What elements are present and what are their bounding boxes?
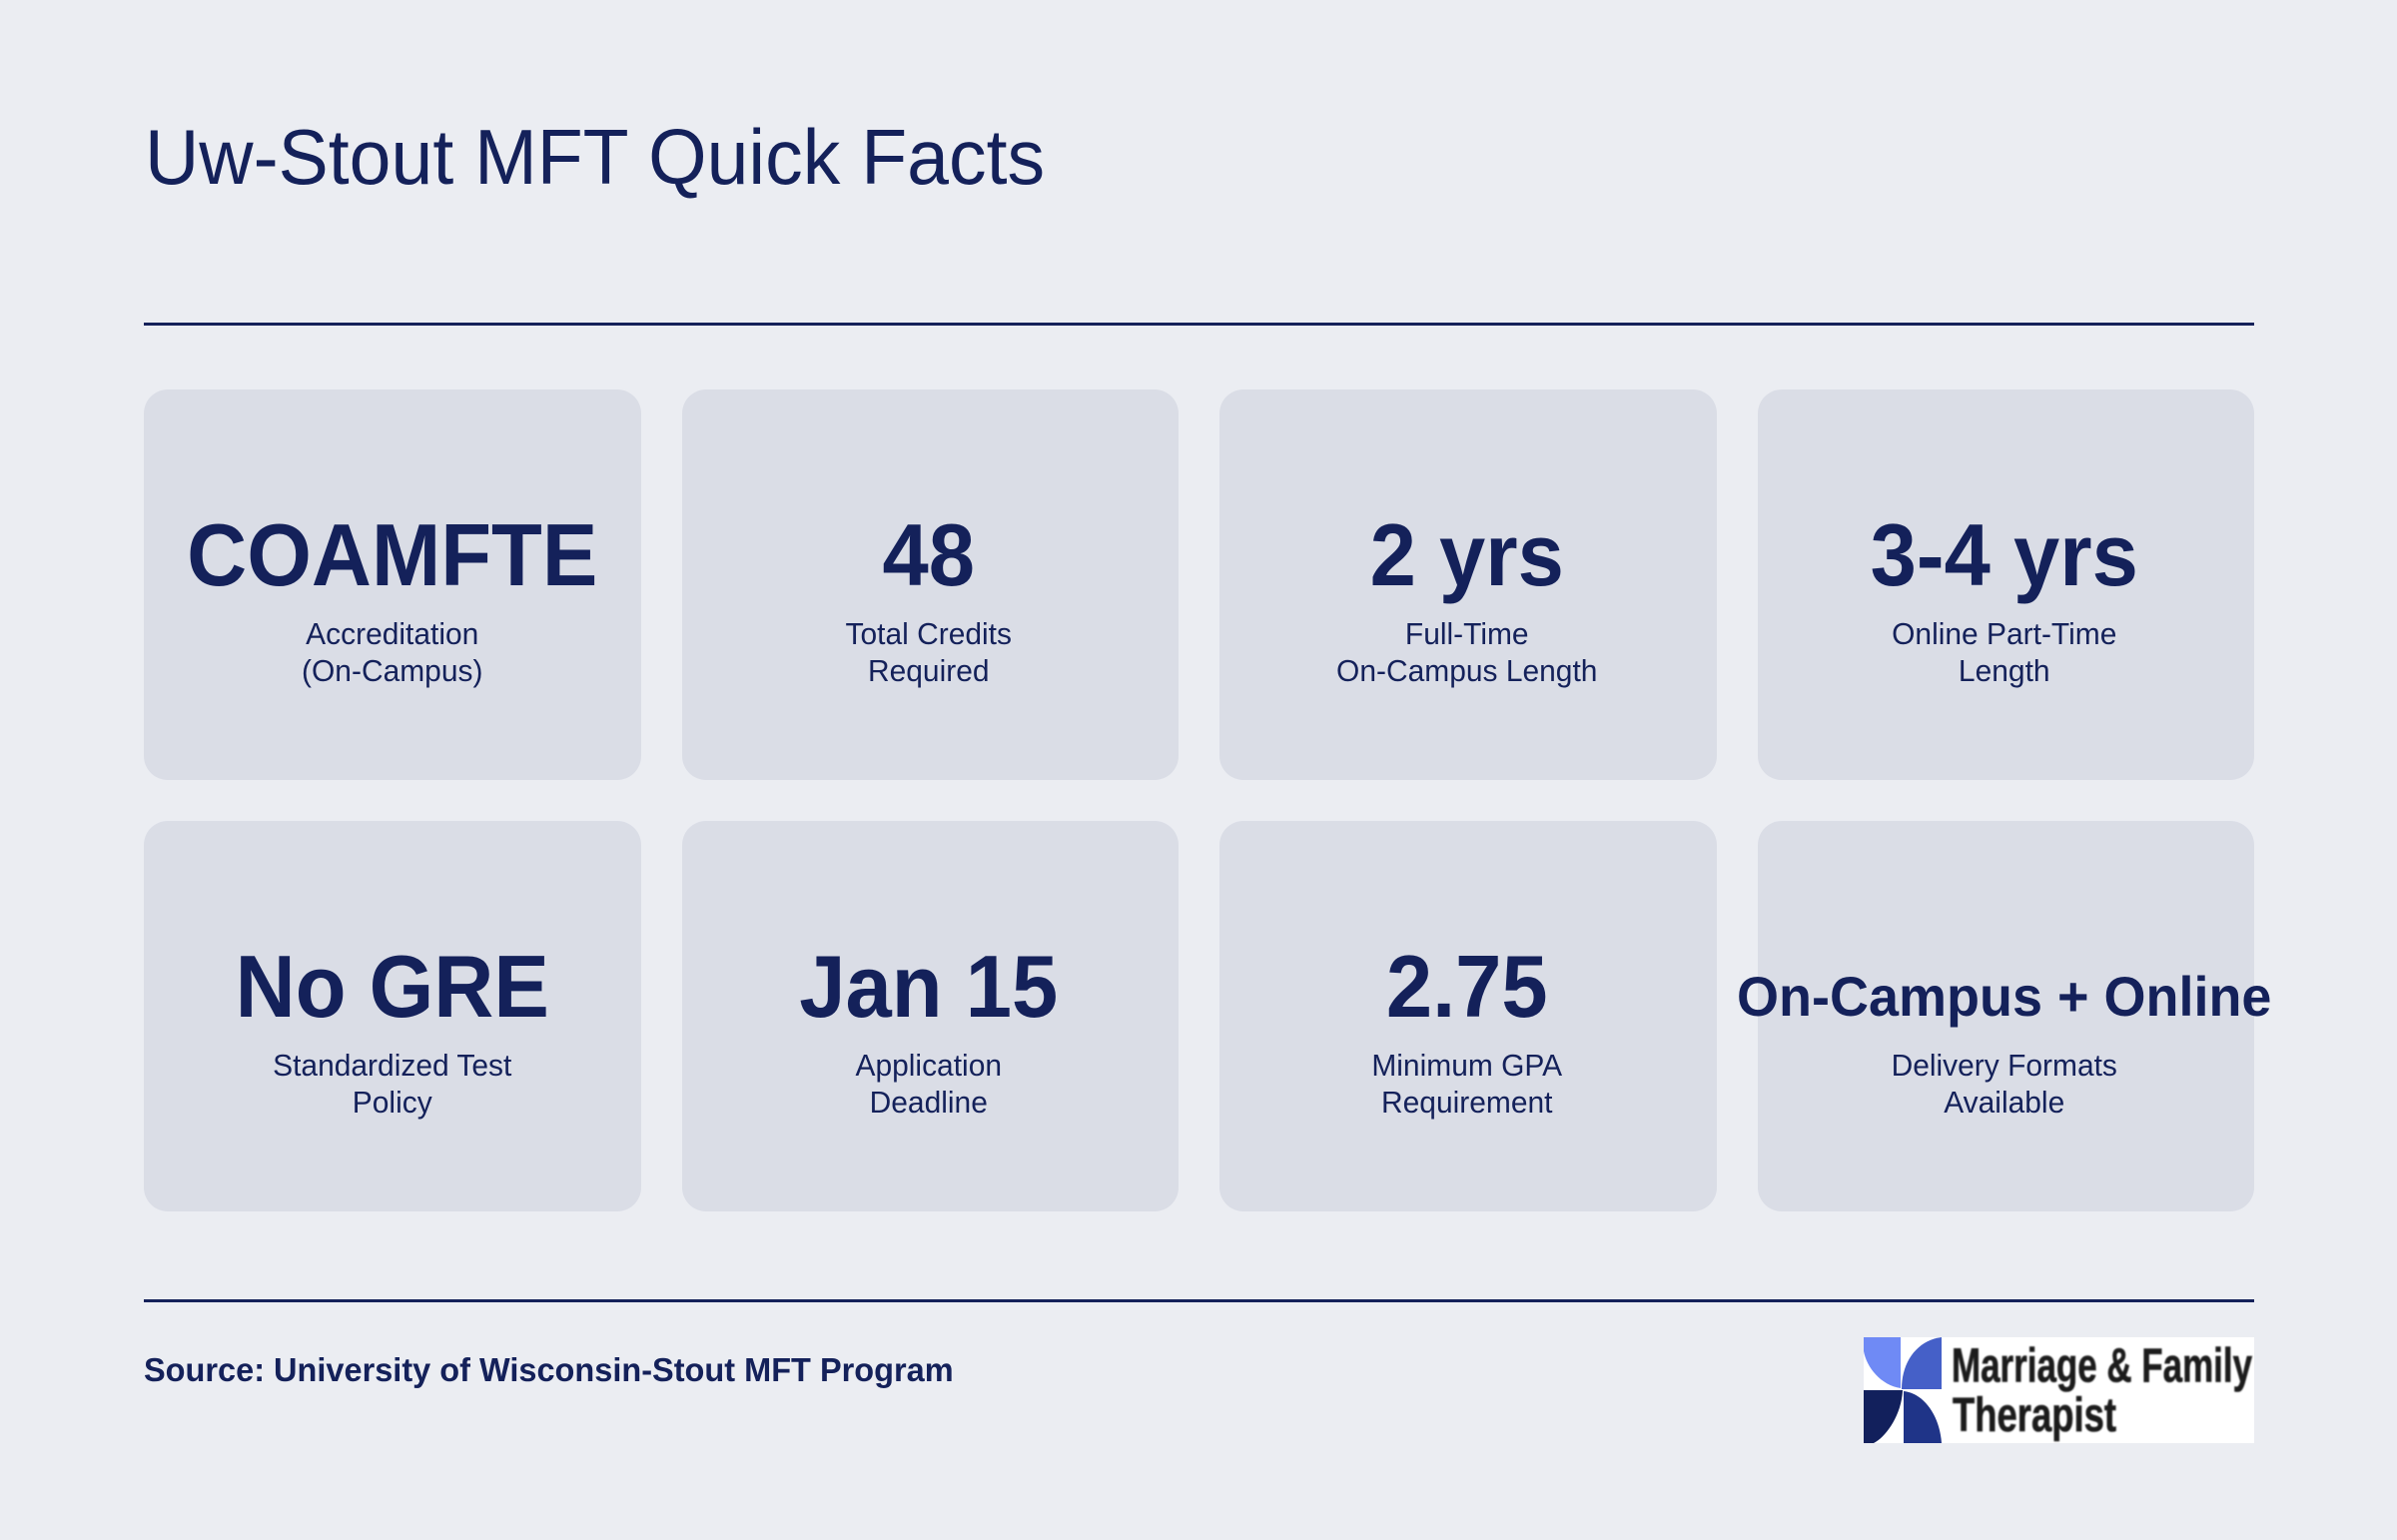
- label: deadline: Application: [855, 1049, 1002, 1083]
- label: GPA: Requirement: [1381, 1085, 1552, 1119]
- label: delivery formats: [1892, 1049, 2117, 1119]
- logo: [1864, 1337, 2254, 1443]
- stat: 2 yrs: 2 yrs: [1369, 505, 1563, 604]
- panel: full-time length card: [1219, 389, 1716, 780]
- label: GPA: [1371, 1049, 1562, 1119]
- stat: 2.75: 2.75: [1385, 937, 1547, 1036]
- label: total credits: [846, 617, 1012, 688]
- stat: COAMFTE: COAMFTE: [187, 505, 597, 604]
- panel: accreditation card: [144, 389, 641, 780]
- logo text: Therapist: [1953, 1389, 2116, 1442]
- stat: 3-4 yrs: 3-4 yrs: [1871, 505, 2138, 604]
- label: accreditation: (On-Campus): [302, 654, 482, 688]
- label: full-time length: [1336, 617, 1597, 688]
- label: test policy: Standardized Test: [273, 1049, 511, 1083]
- label: accreditation: [302, 617, 482, 688]
- label: delivery formats: Delivery Formats: [1892, 1049, 2117, 1083]
- label: total credits: Required: [868, 654, 990, 688]
- panel: GPA card: [1219, 821, 1716, 1211]
- panel: deadline card: [681, 821, 1179, 1211]
- stat: 48: 48: [882, 505, 975, 604]
- icon: pinwheel: [1864, 1337, 1942, 1443]
- label: total credits: Total Credits: [846, 617, 1012, 651]
- stat: Jan 15: Jan 15: [799, 937, 1058, 1036]
- label: part-time length: Length: [1959, 654, 2050, 688]
- panel: delivery formats card: [1758, 821, 2254, 1211]
- label: deadline: Deadline: [870, 1085, 988, 1119]
- label: delivery formats: Available: [1944, 1085, 2064, 1119]
- label: full-time length: Full-Time: [1404, 617, 1528, 651]
- label: part-time length: Online Part-Time: [1892, 617, 2116, 651]
- logo text: [1952, 1340, 2252, 1442]
- stat: No GRE: No GRE: [236, 937, 549, 1036]
- stat: On-Campus + Online: On-Campus + Online: [1737, 965, 2271, 1028]
- panel: GRE policy card: [144, 821, 641, 1211]
- label: test policy: Policy: [353, 1085, 432, 1119]
- label: deadline: [855, 1049, 1002, 1119]
- label: full-time length: On-Campus Length: [1336, 654, 1597, 688]
- panel: total credits card: [681, 389, 1179, 780]
- panel: part-time length card: [1758, 389, 2254, 780]
- title: Uw-Stout MFT Quick Facts: [145, 113, 1045, 201]
- label: test policy: [273, 1049, 511, 1119]
- source text: Source: University of Wisconsin-Stout MFT Program: [144, 1351, 954, 1388]
- label: part-time length: [1892, 617, 2116, 688]
- label: accreditation: Accreditation: [306, 617, 478, 651]
- label: GPA: Minimum GPA: [1371, 1049, 1562, 1083]
